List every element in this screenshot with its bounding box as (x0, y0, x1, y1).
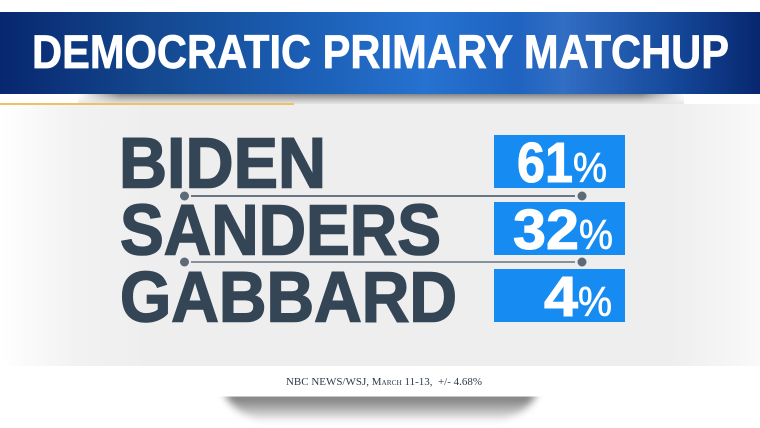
value box: Gabbard 4%: % (578, 278, 612, 325)
connector line 2 (180, 258, 586, 266)
value box: Biden 61%: % (573, 144, 607, 191)
value box: Sanders 32%: 32 (513, 198, 579, 262)
gold accent rule (0, 103, 294, 105)
source caption strip (0, 366, 760, 396)
value box: Sanders 32% (494, 198, 625, 262)
value box: Biden 61% (494, 131, 625, 195)
name: Sanders: SANDERS (120, 192, 441, 270)
connector line 1 (180, 192, 586, 200)
value box: Gabbard 4%: 4 (544, 265, 578, 329)
panel: light grey backdrop (0, 104, 760, 366)
value box: Biden 61%: 61 (517, 131, 573, 195)
name: Biden: BIDEN (119, 124, 326, 204)
candidate names (119, 124, 457, 338)
value box: Sanders 32%: % (579, 211, 613, 258)
name: Gabbard: GABBARD (120, 258, 457, 338)
footer drop shadow (224, 392, 537, 419)
source caption: NBC NEWS/WSJ, March 11-13, +/- 4.68% (286, 377, 482, 388)
panel: title banner (0, 12, 760, 94)
banner drop shadow (78, 94, 684, 104)
value box: Gabbard 4% (494, 265, 625, 329)
